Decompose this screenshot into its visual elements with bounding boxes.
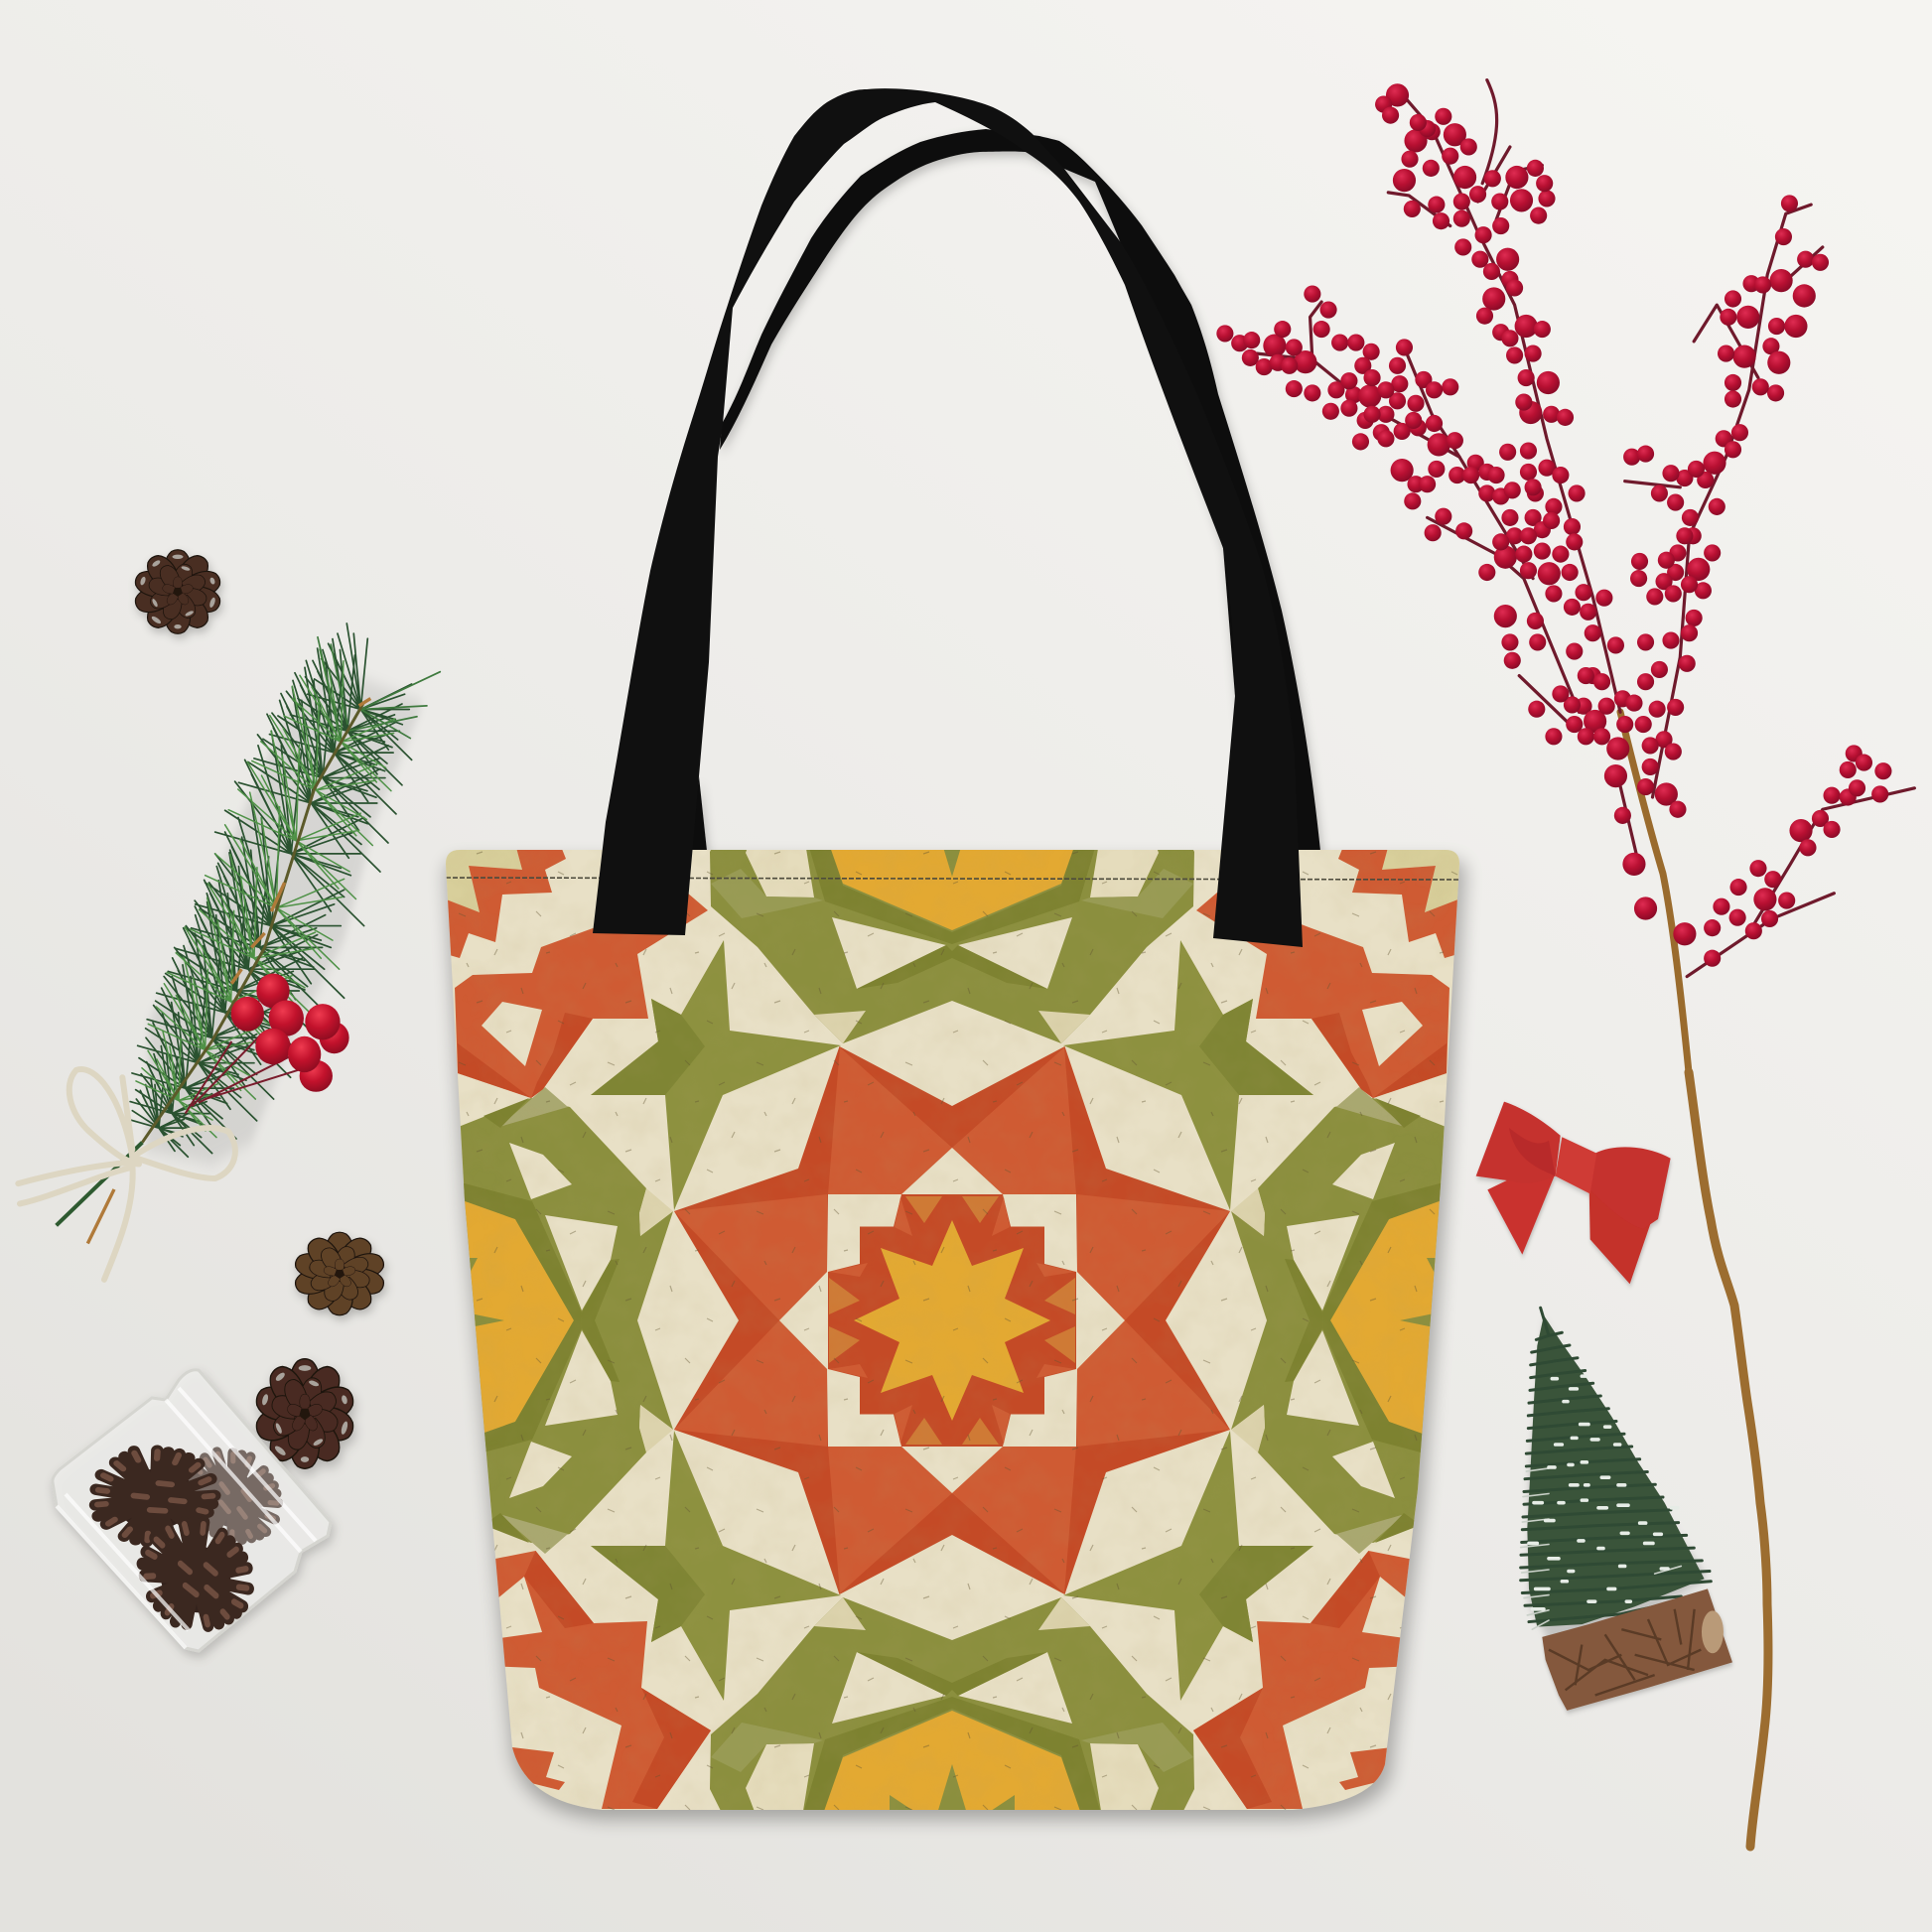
lower right berries — [1704, 745, 1891, 967]
red berries on sprig — [231, 974, 349, 1092]
upper berries — [1375, 83, 1574, 426]
jar neck and rim highlights — [57, 1388, 316, 1648]
tree snow flecks — [1529, 1376, 1678, 1609]
pine needles dark — [128, 623, 412, 1157]
cones inside jar — [85, 1439, 223, 1553]
jar body — [53, 1370, 331, 1651]
sprig soft shadow — [146, 666, 424, 1164]
bottom-left orange corner motif — [485, 1551, 711, 1809]
pine cone middle — [292, 1232, 387, 1315]
tote bag shadow — [446, 860, 1465, 1820]
wooden log base — [1542, 1588, 1732, 1711]
paper flecks — [437, 844, 1469, 1817]
top-left orange corner motif — [436, 844, 708, 1098]
pine needles light — [136, 649, 395, 1138]
bow wing right — [1588, 1147, 1671, 1229]
middle berries — [1391, 442, 1696, 945]
cone behind neck — [169, 1434, 296, 1558]
pine cone beside jar — [253, 1359, 356, 1468]
red berry branch — [1216, 80, 1914, 977]
sprig stem — [142, 702, 364, 1143]
red ribbon bow — [1476, 1102, 1671, 1284]
stitch line — [446, 878, 1459, 880]
tree shadow — [1529, 1320, 1708, 1639]
berry stems — [186, 1035, 298, 1114]
small bottle-brush tree — [1521, 1308, 1732, 1711]
glass jar with pine cones — [53, 1370, 331, 1651]
twine bow — [18, 1069, 235, 1280]
berry branch trunk — [1620, 712, 1768, 1847]
kaleidoscope star pattern — [446, 824, 1458, 1817]
pine sprig with berries and twine — [18, 623, 440, 1280]
top-right orange corner motif — [1196, 844, 1468, 1098]
pale needle tips — [1521, 1468, 1681, 1629]
right berries — [1623, 195, 1829, 641]
bow tail left — [1487, 1173, 1556, 1255]
branch stems — [1257, 80, 1914, 977]
back handle strap — [690, 129, 1320, 851]
left berries — [1216, 286, 1463, 457]
bottom-right orange corner motif — [1193, 1551, 1419, 1809]
tree foliage core — [1527, 1315, 1705, 1627]
long tip needles — [318, 637, 440, 739]
paper mottling — [498, 881, 1442, 1803]
pine cone top — [132, 550, 223, 633]
tree needles — [1521, 1308, 1711, 1622]
bow tail right — [1589, 1186, 1652, 1284]
bow knot — [1556, 1137, 1596, 1193]
tote bag body with geometric pattern — [436, 824, 1469, 1817]
bow wing left — [1476, 1102, 1561, 1183]
front handle strap — [593, 88, 1303, 947]
